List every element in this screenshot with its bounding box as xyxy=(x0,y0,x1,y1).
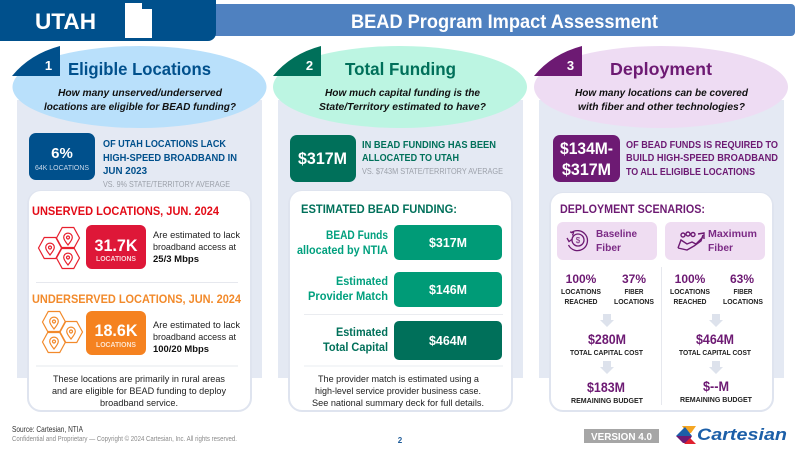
stat description xyxy=(362,139,496,164)
maximum remaining budget: REMAINING BUDGET xyxy=(680,395,752,404)
question xyxy=(575,87,749,113)
maximum metrics: FIBER xyxy=(734,287,753,296)
unserved description: 25/3 Mbps xyxy=(153,254,199,265)
scenario pill: baseline fiber: Baseline xyxy=(596,228,637,240)
provider match note: See national summary deck for full details. xyxy=(312,398,484,409)
underserved description: Are estimated to lack xyxy=(153,320,240,331)
funding row: NTIA: allocated by NTIA xyxy=(297,245,388,257)
funding row: total capital: Total Capital xyxy=(323,342,388,354)
arrow: baseline to capital xyxy=(600,314,614,327)
cartesian logo xyxy=(676,426,787,444)
stat description: IN BEAD FUNDING HAS BEEN xyxy=(362,139,496,151)
number tab 2: 2 xyxy=(306,58,313,73)
funding row: provider match: $146M xyxy=(429,283,467,297)
arrow: maximum to capital xyxy=(709,314,723,327)
number tab 3: 3 xyxy=(567,58,574,73)
stat description: ALLOCATED TO UTAH xyxy=(362,152,459,164)
unserved count: 31.7K xyxy=(94,236,138,255)
icon: red location hexagons xyxy=(38,228,80,268)
header ellipse xyxy=(534,46,788,128)
question xyxy=(319,87,487,113)
cartesian logo: Cartesian xyxy=(697,426,787,444)
number tab 1: 1 xyxy=(45,58,52,73)
funding row: NTIA: BEAD Funds xyxy=(326,230,388,242)
unserved heading: UNSERVED LOCATIONS, JUN. 2024 xyxy=(32,204,219,218)
header ellipse xyxy=(273,46,527,128)
underserved description xyxy=(153,320,240,355)
stat description: TO ALL ELIGIBLE LOCATIONS xyxy=(626,166,755,178)
maximum capital cost: TOTAL CAPITAL COST xyxy=(679,348,751,357)
source: Source: Cartesian, NTIA xyxy=(12,425,84,434)
funding row: provider match: Provider Match xyxy=(308,291,388,303)
heading: Total Funding xyxy=(345,59,456,79)
maximum metrics: 63% xyxy=(730,272,754,286)
underserved heading: UNDERSERVED LOCATIONS, JUN. 2024 xyxy=(32,292,241,306)
stat description: BUILD HIGH-SPEED BROADBAND xyxy=(626,152,778,164)
heading: Deployment xyxy=(610,59,712,79)
funding row: total capital: Estimated xyxy=(336,327,388,339)
baseline metrics: REACHED xyxy=(564,297,598,306)
funding row: provider match: Estimated xyxy=(336,276,388,288)
provider match note: high-level service provider business case. xyxy=(315,386,481,397)
maximum remaining budget xyxy=(680,379,752,404)
number tab 2 xyxy=(273,46,321,76)
question: How many locations can be covered xyxy=(575,87,749,99)
white card xyxy=(550,193,773,411)
scenario pill: maximum fiber xyxy=(665,222,765,260)
header ellipse xyxy=(12,46,266,128)
baseline capital cost: $280M xyxy=(588,332,626,347)
baseline metrics: 37% xyxy=(622,272,646,286)
state average comparison: VS. 9% STATE/TERRITORY AVERAGE xyxy=(103,179,230,189)
funding row: NTIA xyxy=(297,225,502,260)
arrow: maximum to budget xyxy=(709,361,723,374)
chart heading: ESTIMATED BEAD FUNDING: xyxy=(301,202,457,216)
unserved description xyxy=(153,230,240,265)
underserved count: LOCATIONS xyxy=(96,342,136,349)
stat box: funds range: $134M- xyxy=(560,139,613,158)
heading: Eligible Locations xyxy=(68,59,211,79)
maximum metrics: 100% xyxy=(675,272,706,286)
unserved count xyxy=(86,225,146,269)
white card xyxy=(28,191,251,411)
page number: 2 xyxy=(398,436,403,445)
baseline metrics: LOCATIONS xyxy=(614,297,654,306)
baseline capital cost: TOTAL CAPITAL COST xyxy=(570,348,643,357)
scenario pill: baseline fiber xyxy=(557,222,657,260)
panel: deployment xyxy=(534,46,788,411)
rural note: and are eligible for BEAD funding to deploy xyxy=(52,386,226,397)
baseline capital cost xyxy=(570,332,643,357)
unserved description: Are estimated to lack xyxy=(153,230,240,241)
panel: eligible locations xyxy=(12,46,266,411)
icon: Utah state shape xyxy=(125,3,152,38)
baseline remaining budget: REMAINING BUDGET xyxy=(571,396,643,405)
maximum capital cost xyxy=(679,332,751,357)
baseline metrics xyxy=(561,272,654,306)
baseline metrics: FIBER xyxy=(624,287,644,296)
copyright: Confidential and Proprietary — Copyright © 2024 Cartesian, Inc. All rights reserved. xyxy=(12,435,237,443)
state average comparison: VS. $743M STATE/TERRITORY AVERAGE xyxy=(362,166,503,176)
stat box: funds range: $317M xyxy=(562,160,611,179)
white card xyxy=(289,191,512,411)
stat box: $317M: $317M xyxy=(298,149,347,168)
stat box: 6% xyxy=(29,133,95,180)
state header: UTAH xyxy=(35,9,96,34)
stat description: JUN 2023 xyxy=(103,165,147,177)
rural note: These locations are primarily in rural areas xyxy=(53,374,225,385)
baseline remaining budget: $183M xyxy=(587,380,625,395)
stat box: funds range xyxy=(553,135,620,182)
title bar: BEAD Program Impact Assessment xyxy=(351,12,659,33)
provider match note: The provider match is estimated using a xyxy=(318,374,480,385)
unserved description: broadband access at xyxy=(153,242,236,253)
baseline metrics: LOCATIONS xyxy=(561,287,601,296)
stat box: 6%: 64K LOCATIONS xyxy=(35,163,89,172)
stat description: HIGH-SPEED BROADBAND IN xyxy=(103,152,237,164)
icon: dollar cycle: $ xyxy=(576,236,581,245)
panel: total funding xyxy=(273,46,527,411)
provider match note xyxy=(312,374,484,409)
question xyxy=(44,87,237,113)
question: State/Territory estimated to have? xyxy=(319,101,487,113)
rural note xyxy=(52,374,226,409)
rural note: broadband service. xyxy=(100,398,178,409)
underserved count: 18.6K xyxy=(94,321,138,340)
maximum capital cost: $464M xyxy=(696,332,734,347)
number tab 1 xyxy=(12,46,60,76)
question: How much capital funding is the xyxy=(325,87,480,99)
question: How many unserved/underserved xyxy=(58,87,223,99)
maximum metrics: LOCATIONS xyxy=(723,297,763,306)
scenario pill: maximum fiber: Fiber xyxy=(708,242,733,254)
funding row: provider match xyxy=(308,272,502,307)
stat description xyxy=(103,138,237,177)
number tab 3 xyxy=(534,46,582,76)
maximum metrics: REACHED xyxy=(674,297,707,306)
underserved count xyxy=(86,311,146,355)
icon: hands and arrow xyxy=(678,232,704,250)
title bar xyxy=(200,4,795,36)
arrow: baseline to budget xyxy=(600,361,614,374)
stat description: OF UTAH LOCATIONS LACK xyxy=(103,138,226,150)
scenario pill: maximum fiber: Maximum xyxy=(708,228,757,240)
maximum metrics: LOCATIONS xyxy=(670,287,710,296)
maximum remaining budget: $--M xyxy=(703,379,729,394)
icon: orange location hexagons xyxy=(42,312,82,352)
state header xyxy=(0,0,216,41)
question: locations are eligible for BEAD funding? xyxy=(44,101,237,113)
baseline metrics: 100% xyxy=(566,272,597,286)
unserved count: LOCATIONS xyxy=(96,256,136,263)
maximum metrics xyxy=(670,272,763,306)
stat description xyxy=(626,139,778,178)
funding row: NTIA: $317M xyxy=(429,236,467,250)
underserved description: broadband access at xyxy=(153,332,236,343)
underserved description: 100/20 Mbps xyxy=(153,344,209,355)
version badge: VERSION 4.0 xyxy=(591,431,652,443)
funding row: total capital: $464M xyxy=(429,334,467,348)
scenarios heading: DEPLOYMENT SCENARIOS: xyxy=(560,202,705,216)
question: with fiber and other technologies? xyxy=(578,101,746,113)
stat description: OF BEAD FUNDS IS REQUIRED TO xyxy=(626,139,778,151)
baseline remaining budget xyxy=(571,380,643,405)
scenario pill: baseline fiber: Fiber xyxy=(596,242,621,254)
funding row: total capital xyxy=(323,321,502,360)
stat box: $317M xyxy=(290,135,356,182)
stat box: 6%: 6% xyxy=(51,145,73,162)
